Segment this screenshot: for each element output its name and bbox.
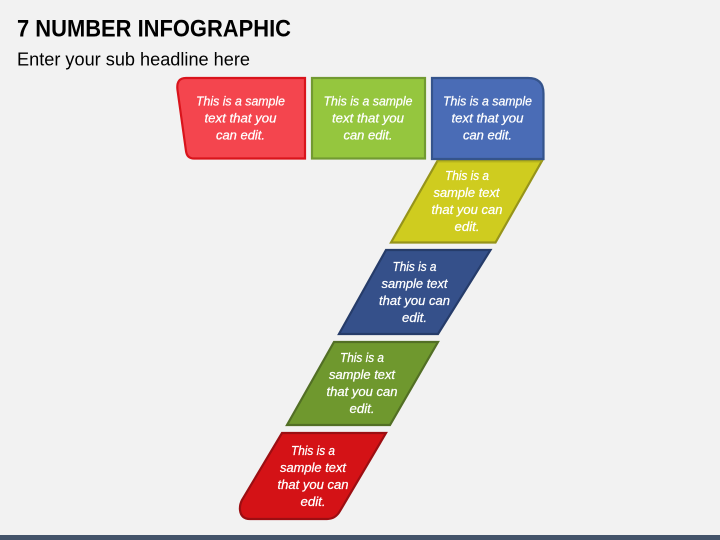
panel: navy parallelogram: sample text — [382, 277, 448, 291]
panel: olive parallelogram: edit. — [350, 402, 374, 416]
panel: red trapezoid: This is a sample — [196, 94, 285, 108]
panel: green square: This is a sample — [324, 94, 413, 108]
panel: dark red rounded parallelogram: This is a — [291, 444, 335, 458]
panel: yellow parallelogram: sample text — [434, 186, 500, 200]
subtitle: Enter your sub headline here — [17, 50, 250, 70]
panel: green square: text that you — [332, 112, 404, 126]
panel: green square — [312, 78, 425, 158]
panel: navy parallelogram: that you can — [379, 294, 450, 308]
footer bar — [0, 535, 720, 540]
panel: red trapezoid: can edit. — [216, 128, 265, 142]
panel: yellow parallelogram: that you can — [432, 203, 503, 217]
panel: yellow parallelogram — [391, 160, 542, 242]
panel: dark red rounded parallelogram — [240, 433, 386, 519]
panel: blue rounded square — [432, 78, 544, 159]
title: 7 NUMBER INFOGRAPHIC — [17, 16, 291, 42]
panel: blue rounded square: can edit. — [463, 128, 512, 142]
panel: green square: can edit. — [344, 128, 392, 142]
panel: navy parallelogram — [339, 250, 490, 334]
panel: olive parallelogram — [287, 342, 438, 425]
panel: olive parallelogram: that you can — [326, 385, 398, 399]
panel: dark red rounded parallelogram: sample text — [280, 461, 347, 475]
panel: navy parallelogram: edit. — [402, 311, 427, 325]
panel: olive parallelogram: sample text — [329, 368, 396, 382]
panel: dark red rounded parallelogram: edit. — [300, 495, 326, 509]
panel: olive parallelogram: This is a — [340, 351, 384, 365]
panel: yellow parallelogram: This is a — [445, 169, 489, 183]
panel: navy parallelogram: This is a — [392, 260, 437, 274]
panel: yellow parallelogram: edit. — [454, 220, 480, 234]
panel: blue rounded square: text that you — [452, 112, 524, 126]
panel: red trapezoid: text that you — [204, 112, 277, 126]
panel: dark red rounded parallelogram: that you can — [278, 478, 349, 492]
panel: red trapezoid — [177, 78, 305, 158]
panel: blue rounded square: This is a sample — [443, 94, 532, 108]
